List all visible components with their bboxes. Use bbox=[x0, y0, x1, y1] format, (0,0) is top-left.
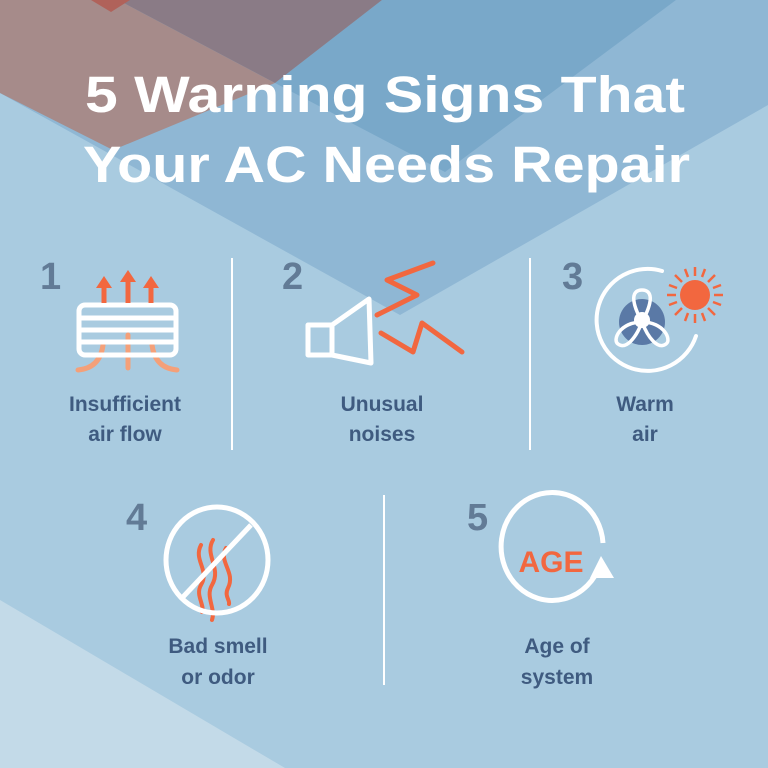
icon: age cycle bbox=[501, 492, 614, 600]
title bbox=[83, 66, 690, 193]
label: Insufficient bbox=[69, 393, 181, 416]
item 1: insufficient air flow: air flow bbox=[88, 423, 162, 446]
title: 5 Warning Signs That bbox=[85, 66, 685, 123]
icon: air grill with arrows bbox=[78, 270, 177, 370]
label: Unusual bbox=[341, 393, 423, 416]
item 5: age of system: 5 bbox=[467, 497, 488, 539]
label: Age of bbox=[524, 635, 591, 658]
dividers bbox=[232, 258, 530, 685]
item 3: warm air: air bbox=[632, 423, 658, 446]
item 1: insufficient air flow bbox=[40, 256, 181, 446]
item 2: unusual noises: 2 bbox=[282, 256, 303, 298]
label: Warm bbox=[616, 393, 674, 416]
item 4: bad smell: or odor bbox=[181, 666, 255, 689]
label: Bad smell bbox=[168, 635, 268, 658]
item 1: insufficient air flow: 1 bbox=[40, 256, 61, 298]
item 3: warm air: 3 bbox=[562, 256, 583, 298]
item 5: age of system: system bbox=[521, 666, 593, 689]
item 3: warm air bbox=[562, 256, 723, 446]
icon: speaker with zigzags bbox=[308, 263, 462, 363]
item 2: unusual noises bbox=[282, 256, 462, 446]
icon: age cycle: AGE bbox=[518, 546, 584, 579]
title: Your AC Needs Repair bbox=[83, 136, 690, 193]
item 2: unusual noises: noises bbox=[349, 423, 415, 446]
icon: no smell bbox=[166, 507, 268, 620]
icon: fan with sun bbox=[597, 267, 723, 371]
item 4: bad smell bbox=[126, 497, 268, 689]
item 4: bad smell: 4 bbox=[126, 497, 147, 539]
item 5: age of system bbox=[467, 492, 614, 689]
